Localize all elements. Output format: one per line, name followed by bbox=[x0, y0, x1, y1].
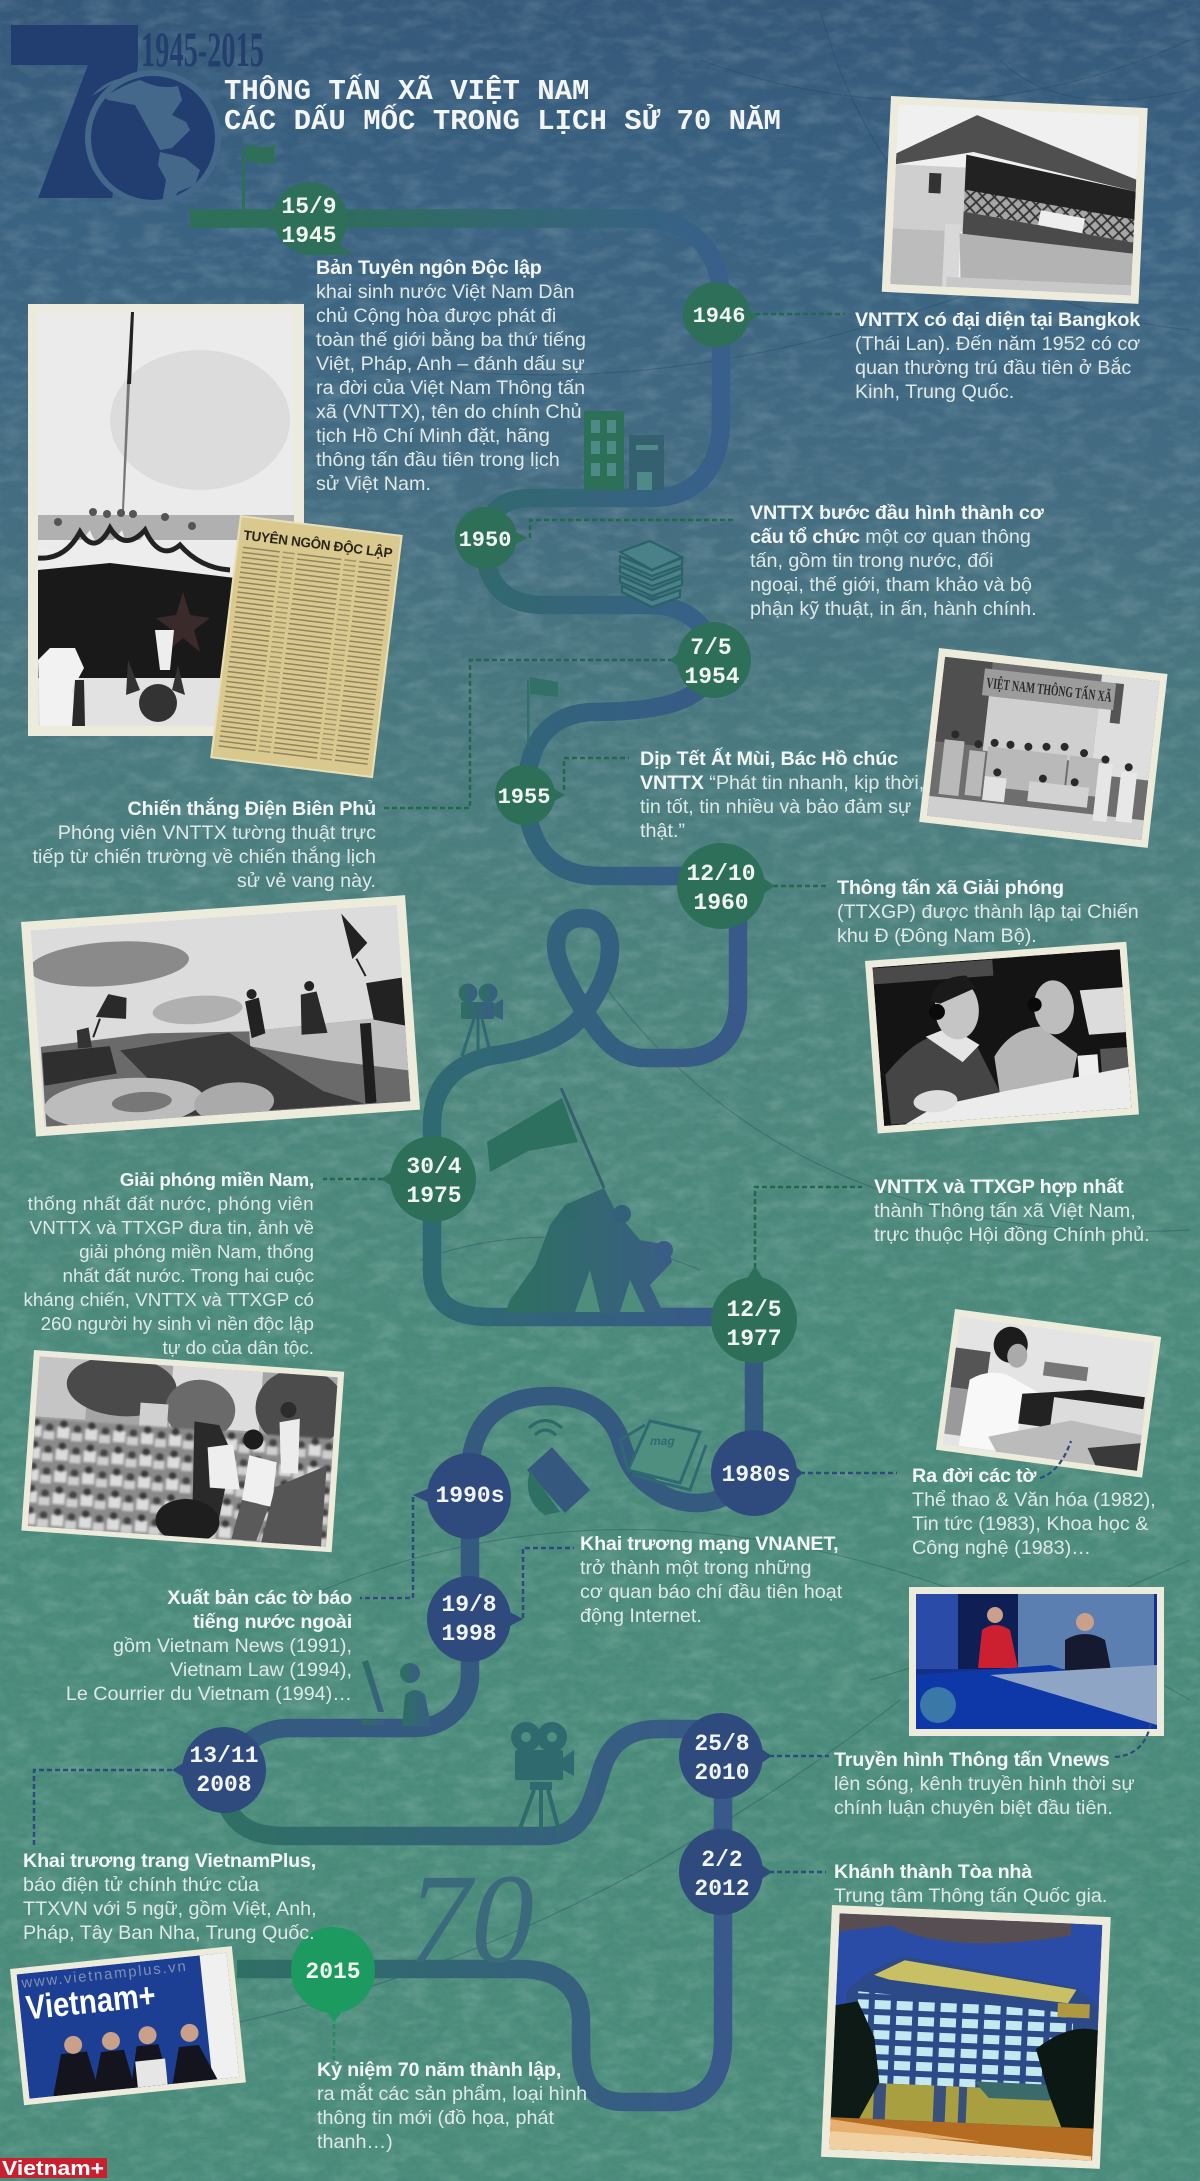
icon: flag 1955 bbox=[527, 677, 558, 746]
text: Ban Tuyen ngon Doc lap bbox=[316, 257, 586, 495]
node: 2015 bbox=[291, 1927, 375, 2022]
text: 1990s foreign language papers bbox=[66, 1587, 352, 1705]
text: 1946 Bangkok bbox=[855, 309, 1140, 403]
text: Dien Bien Phu: sử vẻ vang này. bbox=[237, 870, 376, 892]
text: 1950 organization: cấu tổ chức một cơ quan thông bbox=[750, 526, 1031, 548]
text: 1950 organization: tấn, gồm tin trong nước, đối bbox=[750, 550, 994, 572]
icon: presenter and microphone bbox=[362, 1660, 431, 1726]
text: 1975 liberation: Giải phóng miền Nam, bbox=[120, 1169, 314, 1190]
text: 1977 merger: thành Thông tấn xã Việt Nam, bbox=[874, 1200, 1136, 1222]
text: 1975 liberation: kháng chiến, VNTTX và TTXGP có bbox=[23, 1289, 314, 1310]
decoration: serif seventy: 70 bbox=[408, 1848, 534, 1990]
text: 1950 organization: phận kỹ thuật, in ấn, hành chính. bbox=[750, 598, 1037, 620]
text: Dien Bien Phu: Chiến thắng Điện Biên Phủ bbox=[128, 798, 376, 820]
icon: film camera large bbox=[511, 1722, 574, 1834]
text: 1955 Tet bbox=[640, 748, 924, 842]
connector: 1950 bbox=[530, 520, 736, 538]
text: 2008 VietnamPlus bbox=[23, 1850, 317, 1944]
text: 1998 VNANET bbox=[580, 1533, 842, 1627]
connector: 2012 bbox=[769, 1871, 826, 1873]
text: 2012 building: Trung tâm Thông tấn Quốc gia. bbox=[834, 1885, 1107, 1907]
connector: 1990s bbox=[360, 1497, 413, 1598]
text: 1998 VNANET: trở thành một trong những bbox=[580, 1557, 811, 1579]
text: 1955 Tet: Dịp Tết Ất Mùi, Bác Hồ chúc bbox=[640, 748, 898, 770]
node: 19/8 1998: 1998 bbox=[441, 1621, 497, 1647]
text: 1977 merger bbox=[874, 1176, 1150, 1246]
node: 12/10 1960 bbox=[677, 843, 775, 929]
text: 1950 organization bbox=[750, 502, 1044, 620]
node: 1990s: 1990s bbox=[435, 1483, 505, 1509]
node: 1990s bbox=[413, 1453, 511, 1539]
node: 13/11 2008: 13/11 bbox=[189, 1743, 259, 1769]
text: 1998 VNANET: Khai trương mạng VNANET, bbox=[580, 1533, 838, 1555]
photo: declaration of independence document bbox=[210, 515, 403, 778]
icon: soldiers raising flag bbox=[487, 1088, 680, 1313]
text: 1946 Bangkok: (Thái Lan). Đến năm 1952 có cơ bbox=[855, 333, 1140, 355]
node: 1980s: 1980s bbox=[721, 1462, 791, 1488]
node: 19/8 1998: 19/8 bbox=[441, 1592, 497, 1618]
text: Dien Bien Phu: Phóng viên VNTTX tường thuật trực bbox=[58, 822, 376, 844]
node: 12/5 1977: 12/5 bbox=[726, 1297, 782, 1323]
connector: 2010 bbox=[769, 1755, 829, 1757]
node: 15/9 1945: 15/9 bbox=[281, 194, 337, 220]
timeline path: 1945 to 1950 bbox=[190, 218, 721, 660]
text: Ban Tuyen ngon Doc lap: khai sinh nước Việt Nam Dân bbox=[316, 281, 575, 303]
node: 30/4 1975 bbox=[381, 1136, 476, 1222]
node: 15/9 1945 bbox=[273, 182, 353, 255]
text: 1950 organization: VNTTX bước đầu hình thành cơ bbox=[750, 502, 1044, 524]
text: Dien Bien Phu bbox=[32, 798, 376, 892]
text: 1946 Bangkok: quan thường trú đầu tiên ở Bắc bbox=[855, 357, 1131, 379]
node: 12/10 1960: 12/10 bbox=[686, 861, 756, 887]
icon: flag 1945 bbox=[242, 144, 276, 213]
connector: 1998 bbox=[523, 1548, 574, 1618]
node: 15/9 1945: 1945 bbox=[281, 223, 337, 249]
photo: news agency group bbox=[919, 648, 1168, 848]
text: 1990s foreign language papers: Xuất bản các tờ báo bbox=[167, 1587, 352, 1609]
node: 2/2 2012 bbox=[679, 1829, 772, 1915]
text: 2010 Vnews: lên sóng, kênh truyền hình thời sự bbox=[834, 1773, 1135, 1795]
text: 1960 TTXGP: (TTXGP) được thành lập tại Chiến bbox=[837, 901, 1139, 923]
text: 1960 TTXGP: Thông tấn xã Giải phóng bbox=[837, 877, 1064, 899]
connectors bbox=[34, 314, 897, 2060]
node: 2/2 2012: 2/2 bbox=[701, 1847, 743, 1873]
photo: radio operators bbox=[865, 942, 1139, 1134]
text: 1955 Tet: VNTTX “Phát tin nhanh, kịp thời, bbox=[640, 772, 924, 794]
node: 25/8 2010: 2010 bbox=[694, 1760, 750, 1786]
node: 1950: 1950 bbox=[459, 528, 511, 553]
node: 1955: 1955 bbox=[498, 785, 550, 810]
text: 2015 anniversary: ra mắt các sản phẩm, loại hình bbox=[317, 2083, 587, 2105]
text: 2015 anniversary bbox=[317, 2059, 587, 2153]
node: 2/2 2012: 2012 bbox=[694, 1876, 750, 1902]
text: 2010 Vnews bbox=[834, 1749, 1135, 1819]
node: 12/10 1960: 1960 bbox=[693, 890, 749, 916]
photo: old house in Bangkok bbox=[882, 96, 1148, 304]
text: 2010 Vnews: Truyền hình Thông tấn Vnews bbox=[834, 1749, 1110, 1771]
text: 1990s foreign language papers: tiếng nước ngoài bbox=[193, 1611, 352, 1633]
text: 1975 liberation: giải phóng miền Nam, thống bbox=[79, 1241, 314, 1262]
text: 1975 liberation: 260 người hy sinh vì nền độc lập bbox=[41, 1313, 314, 1334]
logo: Vietnam+: Vietnam+ bbox=[2, 2158, 104, 2180]
text: 1960 TTXGP: khu Đ (Đông Nam Bộ). bbox=[837, 925, 1037, 947]
node: 30/4 1975: 1975 bbox=[406, 1183, 462, 1209]
connector: 1946 bbox=[755, 313, 845, 315]
text: 2012 building bbox=[834, 1861, 1107, 1907]
timeline path: 1977 to 2008 bbox=[235, 1340, 754, 1760]
text: 2008 VietnamPlus: Khai trương trang VietnamPlus, bbox=[23, 1850, 316, 1872]
text: 1998 VNANET: cơ quan báo chí đầu tiên hoạt bbox=[580, 1581, 842, 1603]
timeline path: 1954 to 1977 bbox=[432, 670, 738, 1317]
text: 1975 liberation: thống nhất đất nước, phóng viên bbox=[28, 1193, 314, 1214]
node: 25/8 2010: 25/8 bbox=[694, 1731, 750, 1757]
text: Ban Tuyen ngon Doc lap: xã (VNTTX), tên do chính Chủ bbox=[316, 401, 582, 423]
text: 1950 organization: ngoại, thế giới, tham khảo và bộ bbox=[750, 574, 1032, 596]
title bbox=[224, 74, 781, 138]
photo: national news center building bbox=[821, 1905, 1111, 2169]
text: Ban Tuyen ngon Doc lap: ra đời của Việt Nam Thông tấn bbox=[316, 377, 585, 399]
node: 7/5 1954: 1954 bbox=[684, 664, 740, 690]
text: 1946 Bangkok: VNTTX có đại diện tại Bangkok bbox=[855, 309, 1140, 331]
node: 1946 bbox=[683, 282, 758, 347]
photo: VietnamPlus launch: Vietnam+ bbox=[24, 1976, 157, 2027]
text: 1980s newspapers: Tin tức (1983), Khoa học & bbox=[912, 1513, 1148, 1535]
connector: newspapers photo bbox=[1040, 1441, 1071, 1478]
timeline path: 2008 to 2015 bbox=[222, 1729, 723, 2102]
node: 1946: 1946 bbox=[693, 304, 745, 329]
photo: Dien Bien Phu battlefield bbox=[21, 895, 420, 1136]
connector: 1960 bbox=[773, 885, 829, 887]
text: 1960 TTXGP bbox=[837, 877, 1139, 947]
photo: Vnews studio bbox=[909, 1587, 1164, 1736]
text: 1955 Tet: thật.” bbox=[640, 820, 685, 842]
node: 25/8 2010 bbox=[679, 1713, 772, 1799]
connector: 1975 bbox=[323, 1178, 383, 1180]
connector: 2015 bbox=[333, 2016, 335, 2060]
logo: big seven with globe bbox=[11, 21, 264, 206]
node: 7/5 1954 bbox=[670, 622, 751, 698]
node: 2015: 2015 bbox=[305, 1959, 361, 1985]
text: 2008 VietnamPlus: Pháp, Tây Ban Nha, Trung Quốc. bbox=[23, 1922, 315, 1944]
node: 1950 bbox=[455, 507, 528, 569]
node: 1980s bbox=[711, 1430, 803, 1516]
text: 1990s foreign language papers: Vietnam Law (1994), bbox=[170, 1659, 352, 1681]
photo: VietnamPlus launch bbox=[10, 1946, 246, 2105]
photo: declaration of independence document: TUYÊN NGÔN ĐỘC LẬP bbox=[243, 528, 393, 561]
text: 1955 Tet: tin tốt, tin nhiều và bảo đảm sự bbox=[640, 796, 911, 818]
text: 2008 VietnamPlus: TTXVN với 5 ngữ, gồm Việt, Anh, bbox=[23, 1898, 317, 1920]
text: Dien Bien Phu: tiếp từ chiến trường về chiến thắng lịch bbox=[32, 846, 376, 868]
icon: film camera top bbox=[458, 984, 503, 1056]
text: 1946 Bangkok: Kinh, Trung Quốc. bbox=[855, 381, 1014, 403]
connector: 1955 bbox=[564, 758, 629, 790]
icon: buildings bbox=[584, 411, 664, 490]
photo: woman at desk bbox=[936, 1309, 1161, 1478]
text: Ban Tuyen ngon Doc lap: tịch Hồ Chí Minh đặt, hãng bbox=[316, 425, 550, 447]
text: 1998 VNANET: động Internet. bbox=[580, 1605, 702, 1627]
logo years: 1945-2015 bbox=[141, 21, 264, 77]
text: 1975 liberation: VNTTX và TTXGP đưa tin, ảnh về bbox=[30, 1217, 314, 1238]
text: Ban Tuyen ngon Doc lap: chủ Cộng hòa được phát đi bbox=[316, 305, 556, 327]
node: 7/5 1954: 7/5 bbox=[690, 635, 732, 661]
text: 1980s newspapers: Công nghệ (1983)… bbox=[912, 1537, 1091, 1559]
photo: news agency group: VIỆT NAM THÔNG TẤN XÃ bbox=[985, 674, 1113, 706]
node: 12/5 1977: 1977 bbox=[726, 1326, 782, 1352]
text: 1975 liberation: tự do của dân tộc. bbox=[163, 1337, 314, 1358]
text: 2008 VietnamPlus: báo điện tử chính thức của bbox=[23, 1874, 259, 1896]
text: 2015 anniversary: thanh…) bbox=[317, 2131, 393, 2153]
connector: vnews photo bbox=[1115, 1722, 1151, 1757]
text: 2010 Vnews: chính luận chuyên biệt đầu tiên. bbox=[834, 1797, 1113, 1819]
node: 1955 bbox=[495, 765, 565, 825]
text: Ban Tuyen ngon Doc lap: toàn thế giới bằng ba thứ tiếng bbox=[316, 329, 586, 351]
icon: paper stack bbox=[620, 541, 682, 607]
text: Ban Tuyen ngon Doc lap: Việt, Pháp, Anh – đánh dấu sự bbox=[316, 353, 585, 375]
text: Ban Tuyen ngon Doc lap: sử Việt Nam. bbox=[316, 473, 431, 495]
icon: hand with phone bbox=[527, 1420, 590, 1515]
icon: magazines bbox=[620, 1421, 706, 1490]
text: 1977 merger: VNTTX và TTXGP hợp nhất bbox=[874, 1176, 1123, 1198]
node: 30/4 1975: 30/4 bbox=[406, 1154, 462, 1180]
connector: 1977 bbox=[755, 1187, 862, 1268]
icon: magazines: mag bbox=[650, 1434, 675, 1448]
text: 2015 anniversary: Kỷ niệm 70 năm thành lập, bbox=[317, 2059, 561, 2081]
text: 1990s foreign language papers: Le Courrier du Vietnam (1994)… bbox=[66, 1683, 352, 1705]
text: 1990s foreign language papers: gồm Vietnam News (1991), bbox=[113, 1635, 352, 1657]
text: 1980s newspapers bbox=[912, 1465, 1156, 1559]
connector: 1980s bbox=[800, 1472, 897, 1474]
node: 13/11 2008 bbox=[172, 1727, 266, 1813]
photo: crowd celebrating bbox=[21, 1350, 348, 1554]
text: Ban Tuyen ngon Doc lap: thông tấn đầu tiên trong lịch bbox=[316, 449, 560, 471]
text: 1980s newspapers: Thể thao & Văn hóa (1982), bbox=[912, 1489, 1156, 1511]
connector: 2008 bbox=[34, 1770, 172, 1846]
text: Ban Tuyen ngon Doc lap: Bản Tuyên ngôn Độc lập bbox=[316, 257, 542, 279]
text: 1975 liberation bbox=[23, 1169, 314, 1358]
text: 1977 merger: trực thuộc Hội đồng Chính phủ. bbox=[874, 1224, 1150, 1246]
node: 12/5 1977 bbox=[711, 1266, 797, 1363]
title: THÔNG TẤN XÃ VIỆT NAM bbox=[224, 75, 589, 108]
text: 1980s newspapers: Ra đời các tờ bbox=[912, 1465, 1036, 1487]
text: 2012 building: Khánh thành Tòa nhà bbox=[834, 1861, 1032, 1883]
node: 13/11 2008: 2008 bbox=[196, 1772, 252, 1798]
node: 19/8 1998 bbox=[427, 1576, 523, 1662]
text: 2015 anniversary: thông tin mới (đồ họa, phát bbox=[317, 2107, 554, 2129]
title: CÁC DẤU MỐC TRONG LỊCH SỬ 70 NĂM bbox=[224, 104, 781, 138]
photo: VietnamPlus launch: www.vietnamplus.vn bbox=[20, 1958, 187, 1992]
connector: 1954 bbox=[383, 660, 673, 808]
photo: flag raising ceremony bbox=[28, 304, 304, 736]
text: 1975 liberation: nhất đất nước. Trong hai cuộc bbox=[63, 1265, 314, 1286]
